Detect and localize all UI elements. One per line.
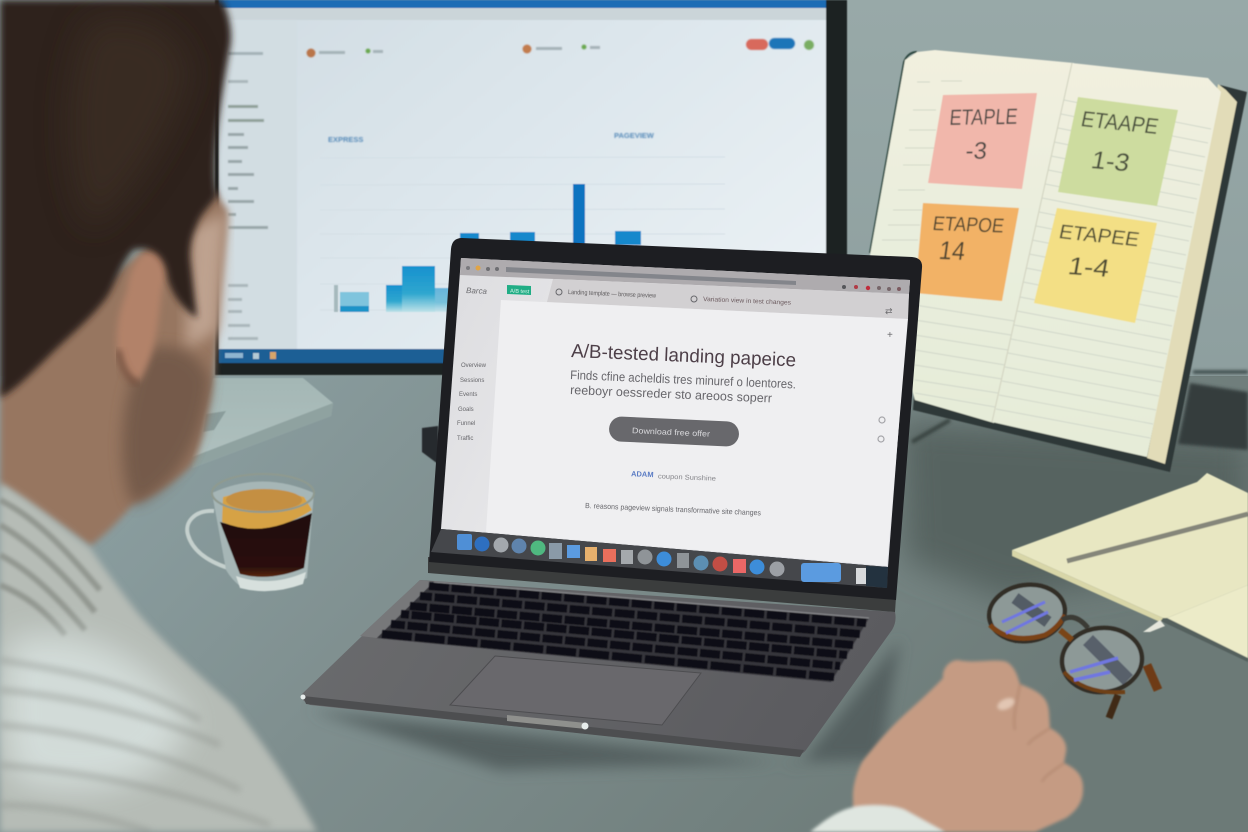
landing page description: Finds cfine acheldis tres minuref o loentores. [570, 368, 796, 391]
browser title bar [460, 258, 910, 294]
coffee [220, 513, 312, 577]
glass rim [212, 474, 314, 512]
browser tab row: A/B test [510, 289, 530, 295]
call to action button [609, 416, 740, 447]
crema [222, 491, 312, 529]
sticky note yellow [1034, 208, 1157, 323]
dock [431, 529, 888, 588]
monitor taskbar [219, 349, 459, 363]
small link line: ADAM [631, 469, 654, 479]
glass base [236, 572, 306, 591]
laptop sidebar links: Overview [461, 363, 487, 369]
ear shadow [118, 350, 138, 384]
browser tab row [466, 279, 909, 319]
browser tab row: ⇄ [885, 306, 893, 316]
landing page description: reeboyr oessreder sto areoos soperr [570, 383, 772, 405]
finger creases [1014, 684, 1064, 782]
laptop base front edge [303, 696, 804, 757]
ear [117, 250, 166, 381]
cup handle [187, 511, 228, 568]
trackpad notch [507, 715, 586, 729]
sticky note orange: 14 [937, 235, 967, 266]
wall background [0, 0, 1248, 440]
external monitor [215, 0, 847, 375]
notebook right page [992, 63, 1221, 457]
laptop sidebar links: Events [459, 392, 477, 398]
sticky note pink: ETAPLE [949, 104, 1019, 130]
monitor chart gridlines [320, 157, 725, 310]
sticky note orange [915, 203, 1019, 301]
laptop sidebar links: Goals [458, 407, 474, 413]
footnote line: B. reasons pageview signals transformative site changes [585, 501, 761, 517]
laptop lid bezel [429, 238, 922, 600]
desk surface [0, 376, 1248, 832]
laptop sidebar links: Traffic [457, 436, 473, 442]
landing page title: A/B-tested landing papeice [571, 341, 796, 371]
sticky note pink [928, 93, 1037, 189]
left page printed notes [882, 81, 962, 240]
laptop shadow [310, 640, 900, 770]
laptop sidebar links: Funnel [457, 421, 475, 427]
monitor chart labels: EXPRESS [328, 135, 363, 144]
laptop sidebar links: Sessions [460, 378, 484, 384]
monitor screen [219, 0, 826, 350]
bright forehead and cheek [185, 212, 226, 350]
knuckle highlight [996, 696, 1016, 712]
sticky note yellow: ETAPEE [1057, 221, 1141, 251]
notebook on stand [870, 50, 1247, 472]
monitor bezel [215, 0, 847, 375]
glasses [985, 580, 1158, 718]
sticky note green: 1-3 [1089, 146, 1132, 177]
man's hand [810, 660, 1083, 832]
hair [0, 0, 231, 398]
hair lighter patches [68, 18, 190, 230]
person in the foreground [0, 0, 317, 832]
dark shaded back of desk [900, 420, 1248, 600]
monitor stand [192, 378, 438, 468]
landing page description [570, 368, 796, 405]
shirt [0, 483, 317, 832]
small link line: coupon Sunshine [658, 473, 716, 483]
ruled lines [915, 100, 1211, 438]
notebook left edge [870, 52, 917, 253]
neck and face [0, 190, 228, 546]
notebook spine fold [992, 63, 1072, 422]
trackpad [450, 656, 701, 725]
right side icons [878, 417, 885, 442]
browser tab row: Barca [466, 286, 488, 296]
monitor sidebar [219, 20, 297, 350]
sticky note yellow: 1-4 [1066, 252, 1112, 283]
sticky note pink: -3 [964, 138, 988, 165]
background cable and dark device [912, 372, 1248, 450]
laptop base [302, 580, 896, 755]
shirt cuff [810, 805, 945, 832]
laptop sidebar links [457, 363, 487, 442]
monitor bar chart [334, 184, 641, 312]
call to action button: Download free offer [632, 426, 711, 439]
shirt body pale blur [3, 635, 190, 789]
plus icon: + [887, 330, 893, 341]
monitor header row [306, 38, 814, 58]
browser tab row: Variation view in test changes [703, 296, 792, 307]
laptop [300, 238, 922, 770]
browser tab row: Landing template — browse preview [568, 289, 656, 300]
monitor chart labels [328, 131, 655, 144]
sticky note green [1058, 97, 1178, 206]
glass body [212, 482, 314, 590]
monitor chart labels: PAGEVIEW [614, 131, 655, 140]
landing page panel [486, 300, 908, 566]
shirt collar stripes [0, 500, 100, 635]
coffee cup [187, 474, 314, 591]
sticky note green: ETAAPE [1079, 106, 1161, 139]
notebook left page [870, 50, 1074, 423]
sticky note orange: ETAPOE [931, 213, 1005, 237]
small link line [631, 469, 716, 483]
laptop screen [441, 258, 910, 567]
notebook page stack [1147, 84, 1237, 464]
monitor top bars [219, 0, 826, 20]
laptop corner highlights [300, 694, 588, 730]
beard shadow [122, 346, 210, 505]
open notebook on desk with pen [1012, 473, 1248, 662]
shirt body stripes [0, 660, 270, 832]
speaker grille left [360, 580, 434, 638]
keyboard [377, 582, 869, 682]
laptop hinge [428, 557, 896, 612]
notebook cover [913, 85, 1247, 472]
